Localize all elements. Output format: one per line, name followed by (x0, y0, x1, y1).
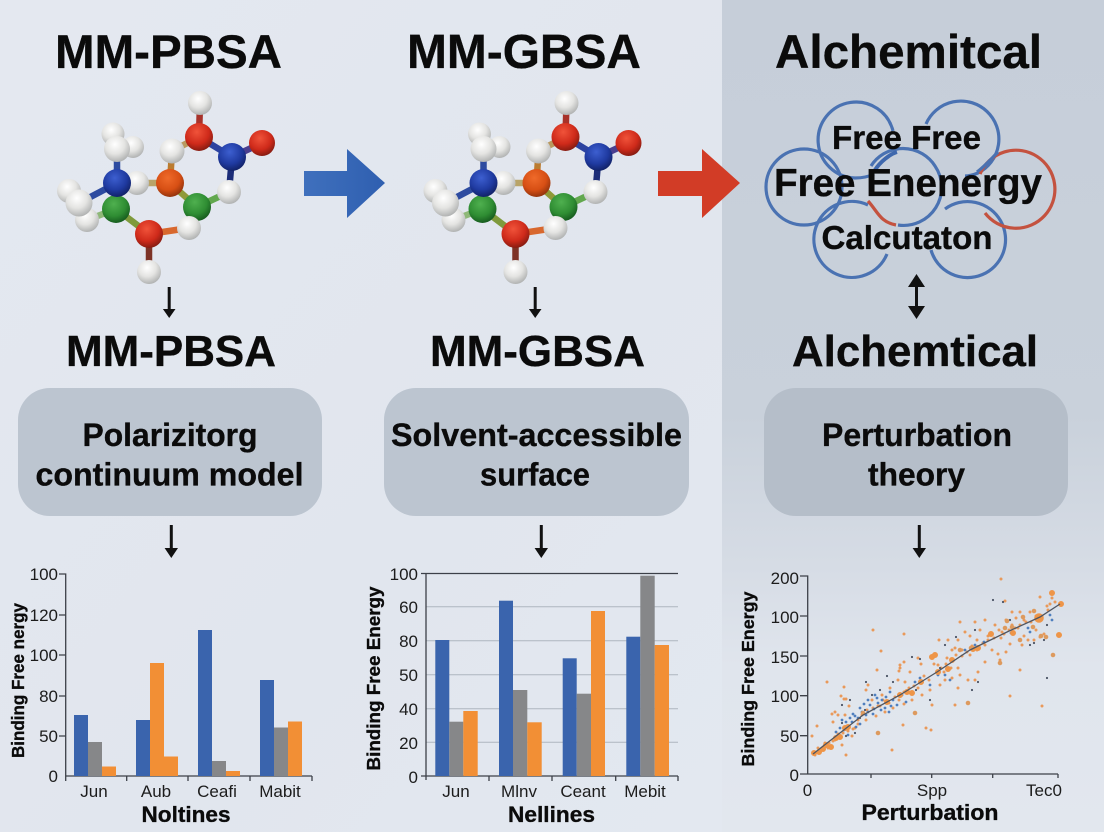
panel: polarizable continuum model (18, 388, 322, 516)
heading: MM-PBSA: MM-PBSA (55, 26, 282, 79)
bar chart: MM-PBSA: 80 (39, 687, 58, 706)
molecule: MM-GBSA ball and stick (424, 91, 642, 284)
bar chart: MM-PBSA: 120 (30, 606, 58, 625)
arrow: down to chart 3 (913, 525, 926, 558)
bar chart: MM-PBSA: Ceafi (197, 782, 237, 801)
scatter chart: Alchemical: 200 (771, 569, 799, 588)
scatter chart: Alchemical: Perturbation (862, 800, 998, 825)
panel: perturbation theory: Perturbation (822, 417, 1012, 453)
scatter chart: Alchemical: 0 (803, 781, 812, 800)
bar chart: MM-GBSA: Ceant (560, 782, 606, 801)
diagram: overlapping free energy circles (766, 101, 1055, 278)
bar chart: MM-PBSA: Mabit (259, 782, 301, 801)
bar chart: MM-PBSA: Noltines (142, 802, 230, 827)
bar chart: MM-PBSA: 0 (49, 767, 58, 786)
background: right panel (722, 0, 1104, 832)
scatter points: medium orange (863, 611, 1053, 733)
heading: MM-PBSA second row: MM-PBSA (66, 327, 276, 376)
scatter points: large orange (814, 593, 1061, 753)
arrow: down to chart 1 (165, 525, 178, 558)
label: Free Free: Free Free (832, 119, 981, 156)
label: Free Enenergy: Free Enenergy (774, 162, 1043, 205)
panel: perturbation theory (764, 388, 1068, 516)
bar chart: MM-GBSA: 100 (390, 565, 418, 584)
panel: perturbation theory: theory (868, 456, 965, 492)
bar chart: MM-GBSA: 0 (409, 768, 418, 787)
heading: MM-GBSA second row: MM-GBSA (430, 327, 645, 376)
arrow: down under MM-GBSA molecule (529, 287, 542, 318)
panel: solvent-accessible surface: surface (480, 456, 590, 492)
scatter chart: Alchemical: Spp (917, 781, 947, 800)
arrow: down to chart 2 (535, 525, 548, 558)
arrow: down under MM-PBSA molecule (163, 287, 176, 318)
scatter points: orange small (812, 579, 1055, 755)
bar chart: MM-GBSA (363, 565, 678, 827)
arrow: red, MM-GBSA to Alchemical (658, 149, 740, 218)
bar chart: MM-PBSA: 100 (30, 646, 58, 665)
bar chart: MM-GBSA: 60 (399, 598, 418, 617)
bar chart: MM-PBSA: 100 (30, 565, 58, 584)
bar chart: MM-GBSA: Nellines (508, 802, 595, 827)
bar chart: MM-GBSA: Binding Free Energy (363, 586, 384, 770)
bar chart: MM-GBSA: Jun (442, 782, 470, 801)
arrow: blue, MM-PBSA to MM-GBSA (304, 149, 385, 218)
scatter points: dark small (842, 600, 1047, 736)
heading: Alchemitcal: Alchemitcal (775, 26, 1042, 79)
scatter points: blue small (836, 615, 1052, 735)
bar chart: MM-PBSA: 50 (39, 727, 58, 746)
scatter chart: Alchemical: 0 (790, 766, 799, 785)
bar chart: MM-PBSA: Binding Free nergy (8, 603, 28, 758)
bar chart: MM-PBSA: Jun (80, 782, 108, 801)
scatter chart: Alchemical: 100 (771, 687, 799, 706)
scatter chart: Alchemical (738, 569, 1062, 825)
panel: solvent-accessible surface: Solvent-accessible (391, 417, 682, 453)
molecule: MM-PBSA ball and stick (57, 91, 275, 284)
trend line (813, 604, 1060, 754)
bar chart: MM-GBSA: Mlnv (501, 782, 537, 801)
bar chart: MM-GBSA: Mebit (624, 782, 666, 801)
label: Calcutaton: Calcutaton (822, 219, 992, 256)
panel: solvent-accessible surface (384, 388, 689, 516)
bar chart: MM-PBSA: Aub (141, 782, 171, 801)
scatter point: largest orange (1034, 613, 1044, 623)
heading: Alchemtical second row: Alchemtical (792, 327, 1038, 376)
scatter chart: Alchemical: 150 (771, 648, 799, 667)
panel: polarizable continuum model: continuum model (36, 456, 304, 492)
background: left panel (0, 0, 722, 832)
bar chart: MM-GBSA: 80 (399, 632, 418, 651)
arrow: double headed under circles (908, 274, 925, 319)
bar chart: MM-GBSA: 20 (399, 734, 418, 753)
heading: MM-GBSA: MM-GBSA (407, 26, 641, 79)
scatter chart: Alchemical: Binding Free Energy (738, 591, 758, 766)
scatter chart: Alchemical: 50 (780, 727, 799, 746)
bar chart: MM-GBSA: 50 (399, 666, 418, 685)
panel: polarizable continuum model: Polarizitorg (82, 417, 258, 453)
bar chart: MM-PBSA (8, 565, 312, 827)
scatter chart: Alchemical: 100 (771, 608, 799, 627)
scatter chart: Alchemical: Tec0 (1026, 781, 1062, 800)
bar chart: MM-GBSA: 40 (399, 700, 418, 719)
